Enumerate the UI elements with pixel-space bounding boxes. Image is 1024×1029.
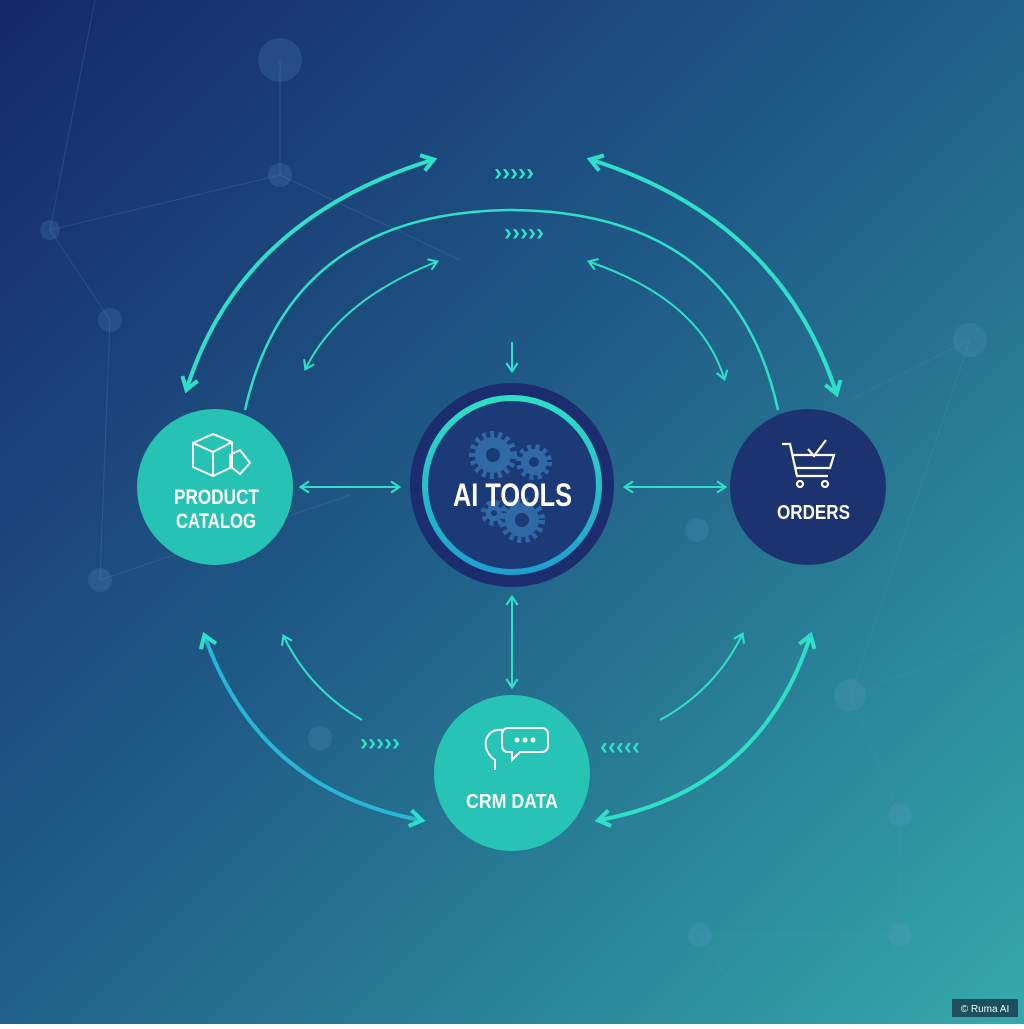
node: product catalog: PRODUCT: [174, 486, 259, 509]
node: orders: [730, 409, 886, 565]
icon: head with speech bubble: [486, 728, 548, 770]
chevrons: ›››››: [494, 159, 534, 186]
chevrons: [360, 159, 640, 760]
watermark: © Ruma AI: [961, 1004, 1009, 1015]
node: product catalog: CATALOG: [176, 510, 256, 533]
node: CRM data: [434, 695, 590, 851]
node: AI tools: AI TOOLS: [453, 477, 572, 513]
chevrons: ‹‹‹‹‹: [600, 733, 640, 760]
node: orders: ORDERS: [777, 502, 850, 524]
icon: cart: [782, 440, 834, 487]
arrows: connection arcs: [187, 160, 836, 820]
icon: box with tag: [193, 434, 250, 476]
node: product catalog: [137, 409, 293, 565]
icon: gears: [472, 434, 549, 540]
chevrons: ›››››: [504, 219, 544, 246]
watermark: [952, 999, 1018, 1017]
chevrons: ›››››: [360, 729, 400, 756]
node: CRM data: CRM DATA: [466, 791, 558, 813]
node: AI tools: [410, 383, 614, 587]
